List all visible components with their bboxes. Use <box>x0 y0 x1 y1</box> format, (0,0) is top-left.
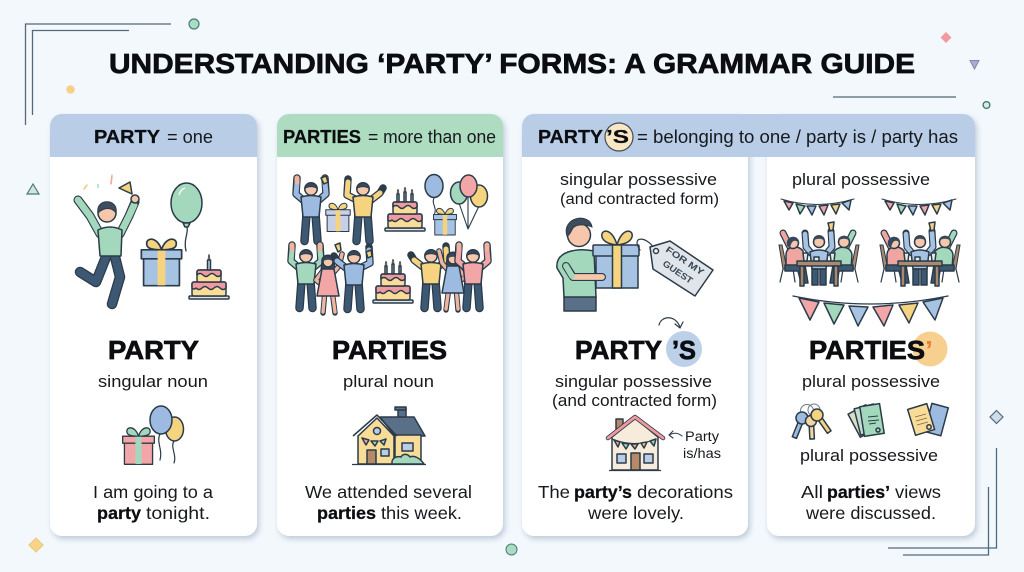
icon: keys <box>789 404 834 440</box>
tag <box>650 241 713 296</box>
corner lines: top left <box>26 24 171 125</box>
word: PARTY'S: PARTY <box>575 335 662 365</box>
note: Party is/has: Party <box>685 429 719 444</box>
icon: balloons and gift <box>425 174 488 235</box>
icon: person holding gift with tag <box>557 218 713 311</box>
panel: PARTY'S singular possessive <box>522 114 748 536</box>
icon: gift <box>141 239 182 286</box>
panel: PARTIES <box>277 114 503 536</box>
example sentence: All <box>801 482 823 502</box>
title: UNDERSTANDING ‘PARTY’ FORMS: A GRAMMAR GUIDE <box>109 48 915 79</box>
label: singular possessive and contracted form: (and contracted form) <box>552 392 717 410</box>
icon: two documents <box>908 403 948 436</box>
card body <box>50 114 257 536</box>
header text: = more than one <box>368 127 496 147</box>
header text <box>283 127 496 147</box>
example sentence: were lovely. <box>587 503 684 523</box>
example sentence: I am going to a <box>93 482 213 502</box>
word: PARTIES': ’ <box>925 335 933 365</box>
icon: friends at table left <box>779 222 859 286</box>
header text: = one <box>167 127 213 147</box>
example sentence <box>801 482 941 523</box>
header text: PARTIES <box>283 127 361 147</box>
label: singular noun: singular noun <box>98 372 208 391</box>
corner lines: bottom right <box>888 448 996 555</box>
header text: PARTY <box>94 127 160 147</box>
header band <box>277 114 503 157</box>
example sentence: this week. <box>381 503 462 523</box>
example sentence: party’s <box>574 482 632 502</box>
example sentence: parties’ <box>827 482 890 502</box>
icon: house with bunting <box>352 407 426 464</box>
label: plural possessive: plural possessive <box>800 447 938 465</box>
word: PARTY'S <box>575 331 702 367</box>
icon: jumping person <box>78 175 139 304</box>
example sentence: were discussed. <box>805 503 936 523</box>
word: PARTIES' <box>809 332 948 366</box>
icon: small bunting right <box>882 199 956 215</box>
header band: PARTY'S spanning two cards <box>522 114 975 157</box>
example sentence: The <box>538 482 570 502</box>
icon: people celebrating, lower row <box>291 243 488 313</box>
card body <box>522 114 748 536</box>
icon: friends at table right <box>880 222 960 286</box>
word: PARTIES': PARTIES <box>809 335 925 365</box>
example sentence: We attended several <box>305 482 472 502</box>
header band <box>50 114 257 157</box>
icon: large bunting <box>793 296 948 326</box>
card body <box>277 114 503 536</box>
arrow: curved to apostrophe S <box>659 318 683 328</box>
label: singular possessive: singular possessive <box>560 171 717 189</box>
example sentence <box>538 482 733 523</box>
header text <box>94 127 213 147</box>
example sentence: tonight. <box>146 503 210 523</box>
icon: stack of cards <box>848 404 884 437</box>
example sentence <box>305 482 472 523</box>
tag: GUEST <box>661 258 695 286</box>
label: plural noun: plural noun <box>343 372 434 391</box>
example sentence <box>93 482 213 523</box>
label: plural possessive: plural possessive <box>792 171 930 189</box>
example sentence: parties <box>317 503 376 523</box>
word: PARTIES: PARTIES <box>332 335 447 365</box>
note: Party is/has <box>669 429 721 461</box>
label: singular possessive: (and contracted form) <box>560 191 719 208</box>
example sentence: decorations <box>637 482 733 502</box>
header band: PARTY'S spanning two cards: = belonging to one / party is / party has <box>637 127 958 147</box>
icon: cake with candles <box>385 187 425 231</box>
note: Party is/has: is/has <box>683 446 721 461</box>
label: singular possessive and contracted form <box>552 373 717 410</box>
icon: second cake <box>373 259 413 303</box>
word: PARTY: PARTY <box>108 335 199 365</box>
icon: gift and balloons <box>123 406 184 464</box>
label: plural possessive: plural possessive <box>802 373 940 391</box>
icon: small bunting left <box>781 199 854 215</box>
word: PARTY'S: ’S <box>672 335 696 365</box>
header band: PARTY'S spanning two cards: PARTY <box>538 127 603 147</box>
example sentence: views <box>895 482 941 502</box>
icon: small house <box>608 417 663 470</box>
example sentence: party <box>97 503 141 523</box>
panel: PARTIES' plural possessive <box>767 114 975 536</box>
panel: PARTY <box>50 114 257 536</box>
icon: people celebrating, upper row <box>296 176 383 241</box>
icon: green balloon <box>171 183 202 251</box>
label: singular possessive <box>560 171 719 208</box>
header band: PARTY'S spanning two cards: ’S <box>606 127 629 147</box>
icon: cake <box>189 254 229 299</box>
tag: FOR MY <box>664 244 706 277</box>
label: singular possessive and contracted form: singular possessive <box>555 373 712 391</box>
card body <box>767 114 975 536</box>
